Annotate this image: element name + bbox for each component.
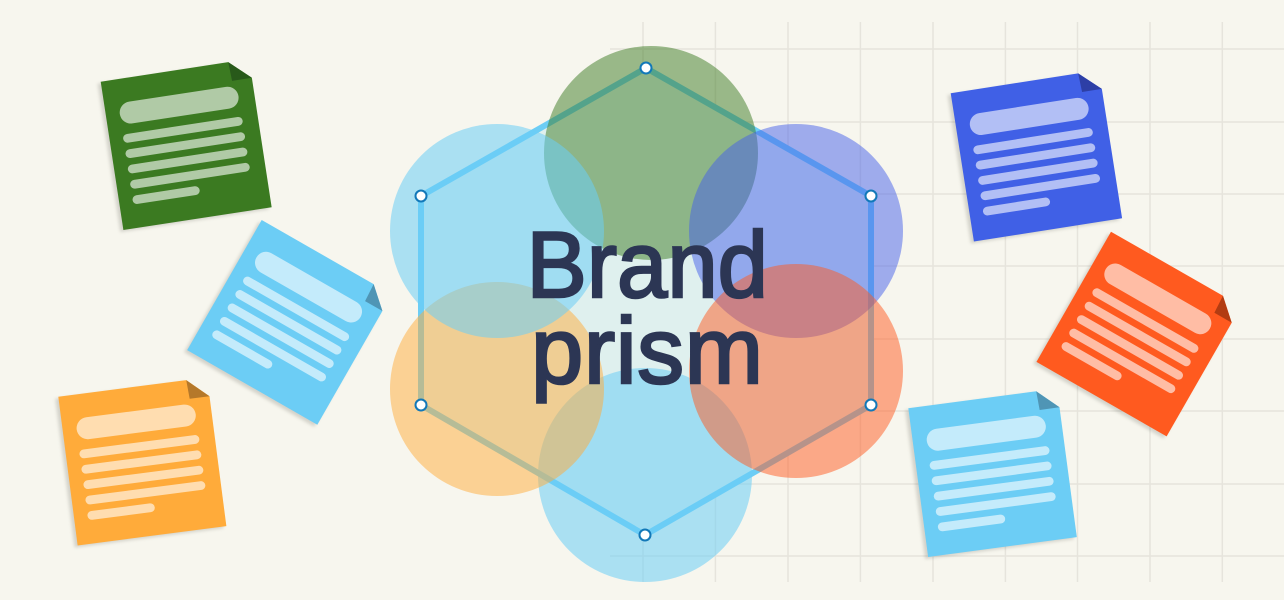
note: green [101,59,272,230]
title: prism [531,298,763,403]
fold [1213,296,1241,323]
circle: bottom light blue [538,368,752,582]
note: light blue left [187,220,392,425]
circle: upper right blue [689,124,903,338]
diagram: brand prism [390,46,903,582]
fold [1078,70,1102,92]
heading bar [75,403,197,441]
circle: lower left orange [390,282,604,496]
note: dark blue [951,70,1122,241]
circle: top green [544,46,758,260]
circle: lower right red-orange [689,264,903,478]
text lines [978,132,1098,211]
heading bar [251,248,366,327]
note: red-orange [1036,232,1241,436]
fold [1036,388,1059,410]
fold [186,377,209,399]
text lines [934,451,1053,527]
text lines [84,439,203,515]
heading bar [118,85,240,125]
heading bar [1100,259,1215,338]
circle: upper left light blue [390,124,604,338]
note: orange [58,377,226,545]
title: Brand [526,211,768,317]
fold [228,59,252,81]
text lines [217,281,345,390]
fold [364,284,392,311]
text lines [1066,293,1194,402]
note: light blue right [908,388,1077,557]
title [526,211,768,403]
heading bar [925,414,1047,452]
hexagon outline [421,68,871,535]
text lines [128,121,248,200]
hexagon vertex markers [416,62,876,540]
heading bar [968,96,1090,137]
